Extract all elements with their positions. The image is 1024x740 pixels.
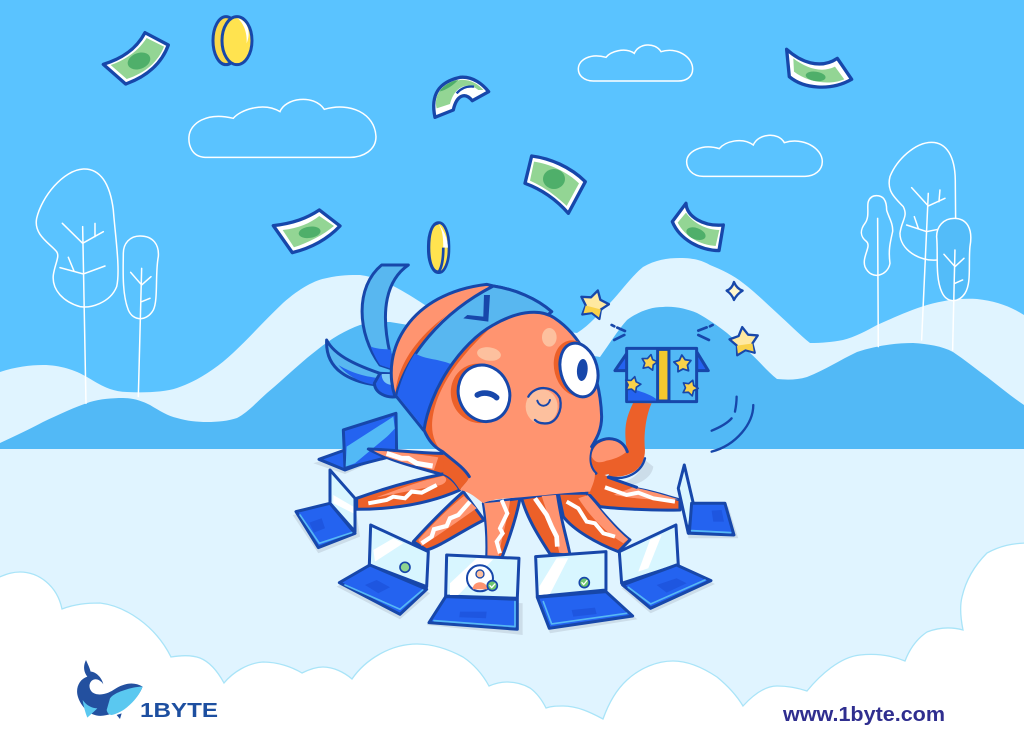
body lower left shadow xyxy=(443,453,469,490)
cloud: top centre outline xyxy=(578,45,693,81)
cloud: right outline xyxy=(687,135,822,176)
tentacle joint fill xyxy=(588,468,633,495)
1BYTE logo xyxy=(77,660,218,722)
tentacle: left xyxy=(357,474,460,509)
bill: curled xyxy=(434,77,489,117)
laptop: lower right xyxy=(536,552,633,628)
laptop: centre with profile xyxy=(429,555,519,629)
light hills xyxy=(0,258,1024,449)
tentacle zigzags xyxy=(368,453,675,553)
ground shadows xyxy=(293,453,738,635)
ribbon knot xyxy=(374,373,397,397)
tentacle: right xyxy=(587,486,680,510)
arm underside outline xyxy=(608,458,645,478)
bill: lower centre xyxy=(672,203,723,251)
headband tails xyxy=(327,265,408,397)
trees: left xyxy=(36,169,158,403)
mouth xyxy=(526,388,561,424)
motion lines xyxy=(712,397,753,452)
ribbon: lower xyxy=(327,340,382,385)
box flaps xyxy=(615,353,627,371)
laptop: far right xyxy=(678,465,734,535)
highlight: forehead left xyxy=(476,346,502,362)
cap xyxy=(391,284,552,397)
logo wordmark: 1BYTE xyxy=(140,700,218,722)
bill: centre xyxy=(525,156,585,213)
coin: top xyxy=(213,17,252,65)
mid blue hills xyxy=(0,307,1024,449)
tentacle: upper left xyxy=(368,449,470,477)
arm holding box xyxy=(590,403,652,478)
laptop: lower left xyxy=(339,525,428,614)
bill: top right xyxy=(787,49,852,87)
star: left xyxy=(577,287,612,320)
body shadow xyxy=(424,325,493,453)
tentacle: lower left xyxy=(413,492,484,550)
arm blob xyxy=(590,439,627,475)
ground xyxy=(0,449,1024,740)
tentacle: bottom mid right xyxy=(522,493,570,555)
laptop: far left xyxy=(296,470,355,548)
tentacle: lower right xyxy=(558,493,630,552)
falling money, right xyxy=(525,49,852,251)
star: right xyxy=(728,325,760,356)
right eye xyxy=(548,336,604,401)
ribbon: upper xyxy=(362,265,408,370)
headband mark xyxy=(463,295,490,322)
sparkle diamond xyxy=(727,282,743,300)
profile icon xyxy=(467,565,497,591)
sparkle lines: right xyxy=(698,325,713,340)
cap shadow xyxy=(395,315,447,397)
headband dark section xyxy=(397,353,453,428)
sparkle lines: left xyxy=(612,325,625,340)
bill: lower left xyxy=(273,210,340,253)
bill: top left xyxy=(103,33,168,84)
blob outline xyxy=(590,439,627,473)
body outlines xyxy=(424,312,602,477)
laptop: right xyxy=(619,525,711,608)
tentacle top outline xyxy=(608,477,637,487)
bottom white clouds xyxy=(0,543,1024,740)
body xyxy=(424,312,602,503)
octopus illustration xyxy=(293,265,760,635)
website url: www.1byte.com xyxy=(782,704,945,726)
arm xyxy=(608,403,652,477)
coin: edge on xyxy=(428,223,449,273)
cloud: left sky outline xyxy=(189,99,376,157)
tentacles xyxy=(357,449,680,558)
tentacle: bottom mid left xyxy=(483,498,520,558)
laptop: back left xyxy=(319,413,397,470)
trees: right xyxy=(861,142,971,350)
box stars xyxy=(623,353,700,397)
highlight: forehead right xyxy=(542,328,557,347)
whale icon xyxy=(77,660,143,719)
headband xyxy=(396,286,552,430)
left eye xyxy=(442,355,518,431)
box body xyxy=(627,348,697,402)
gift box xyxy=(615,348,708,402)
falling money and coins, left xyxy=(103,17,489,273)
